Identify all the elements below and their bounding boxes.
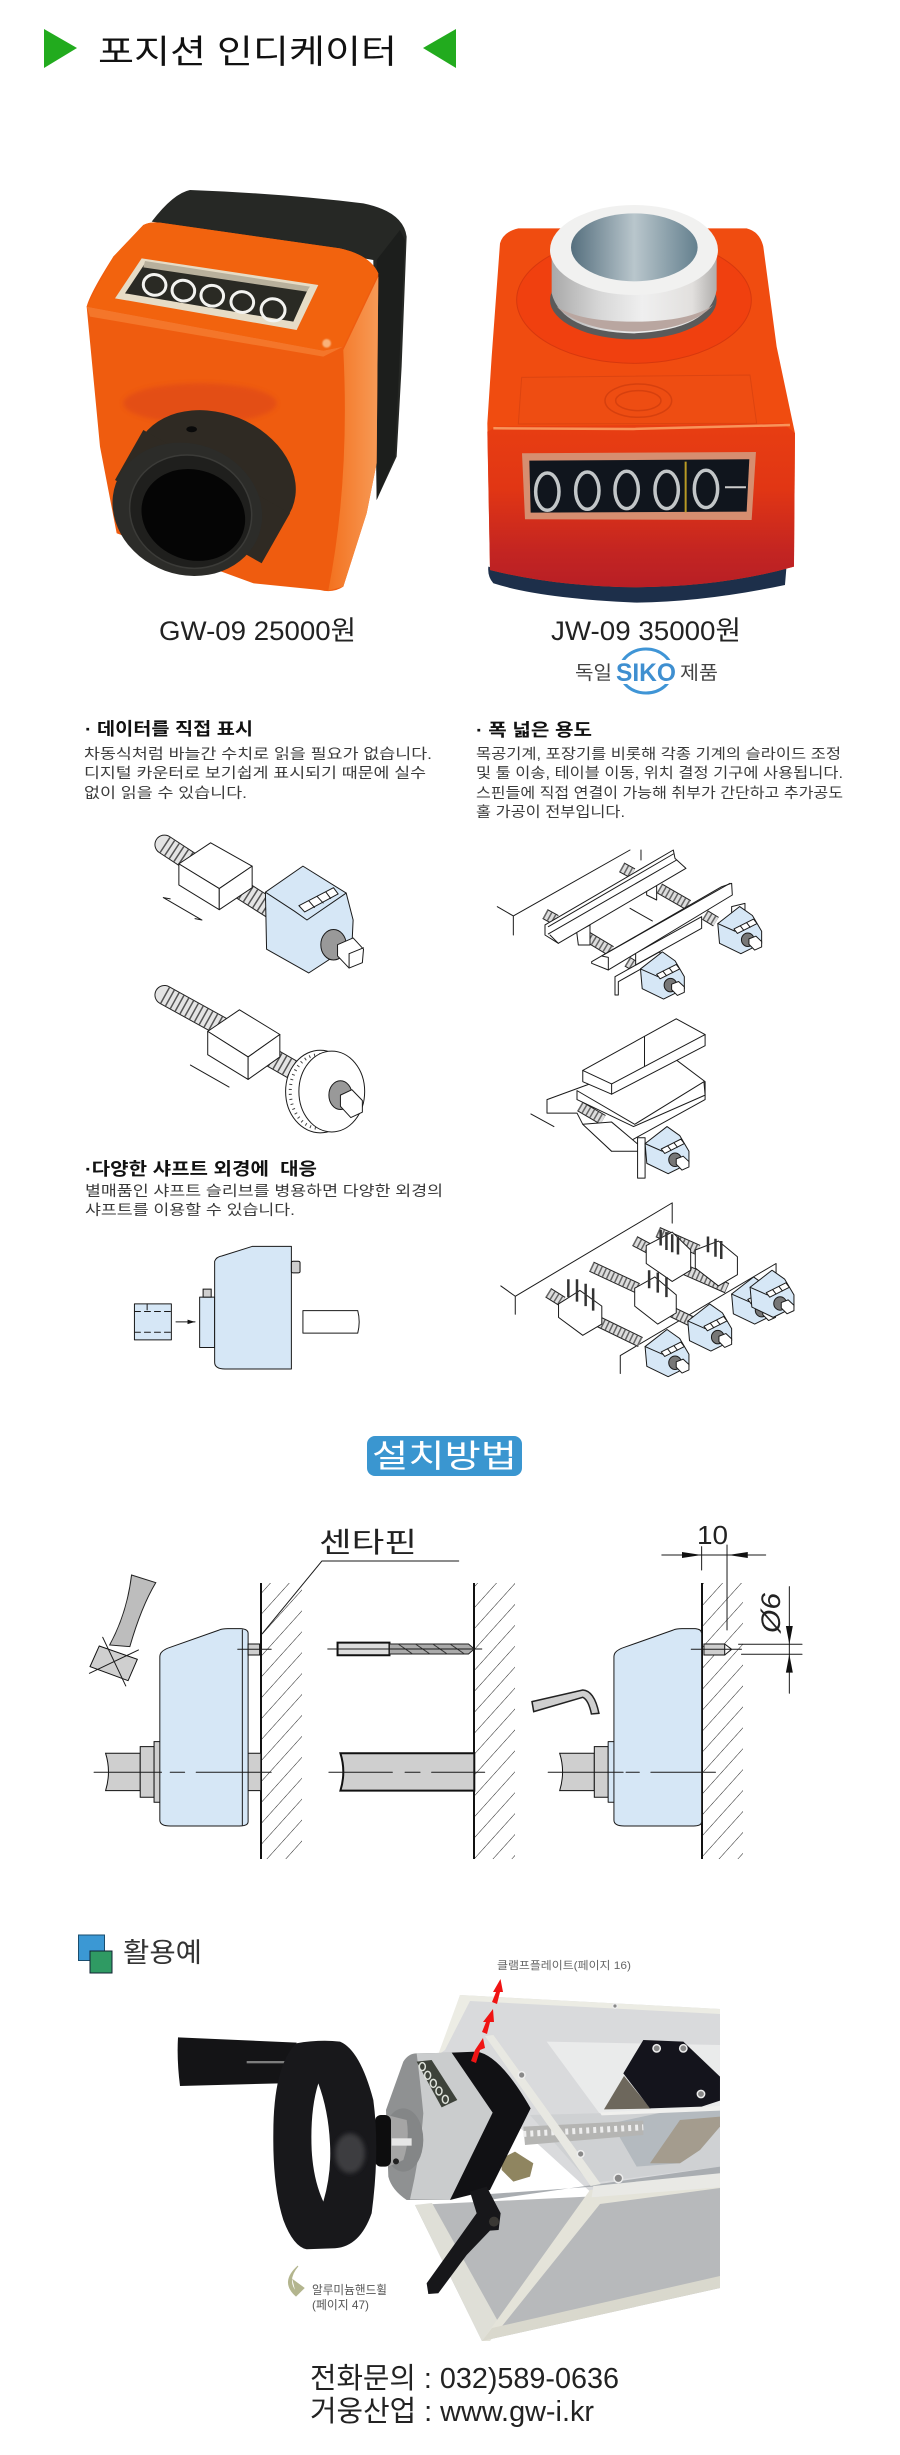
text block: wide range of uses: 및 툴 이송, 테이블 이동, 위치 결정 기구에 사용됩니다. [476, 765, 843, 782]
diagram: multi-axis machine [501, 1203, 794, 1377]
label: dimension 10: 10 [697, 1520, 728, 1550]
caption: GW-09 price: GW-09 25000원 [159, 616, 356, 646]
text block: wide range of uses: 스핀들에 직접 연결이 가능해 취부가 간단하고 추가공도 [476, 785, 843, 802]
text block: various shaft diameters: ·다양한 샤프트 외경에 대응 [85, 1159, 317, 1179]
text block: wide range of uses: · 폭 넓은 용도 [476, 720, 592, 740]
text block: various shaft diameters: 별매품인 샤프트 슬리브를 병용하면 다양한 외경의 [85, 1183, 443, 1200]
slide assembly [485, 2004, 720, 2200]
text block: direct data display: · 데이터를 직접 표시 [85, 719, 253, 739]
icon: curved arrow [288, 2266, 304, 2296]
heading badge: installation method: 설치방법 [372, 1438, 517, 1474]
contact: website: 거웅산업 : www.gw-i.kr [310, 2395, 594, 2428]
diagram: step 2 drilling [328, 1643, 485, 1791]
icon: right green triangle [423, 29, 456, 68]
text block: various shaft diameters: 샤프트를 이용할 수 있습니다. [85, 1202, 295, 1219]
title [44, 29, 456, 70]
text block: wide range of uses: 목공기계, 포장기를 비롯해 각종 기계의 슬라이드 조정 [476, 746, 841, 763]
diagram: slide table [531, 1019, 705, 1178]
text block: direct data display: 차동식처럼 바늘간 수치로 읽을 필요가 없습니다. [84, 746, 432, 763]
text block: various shaft diameters [85, 1159, 443, 1219]
label: aluminum handwheel: (페이지 47) [312, 2298, 369, 2312]
title text: 포지션 인디케이터 [98, 33, 397, 70]
diagram: shaft sleeve [134, 1246, 359, 1369]
icon: left green triangle [44, 29, 77, 68]
text block: wide range of uses: 홀 가공이 전부입니다. [476, 804, 625, 821]
diagram: step 3 fitted with dimensions [532, 1545, 802, 1826]
diagram: step 1 center pin [89, 1561, 459, 1826]
contact: phone: 전화문의 : 032)589-0636 [310, 2363, 619, 2395]
photo: handwheel on acrylic slide [178, 1995, 720, 2341]
badge: made in Germany SIKO: 독일 [575, 662, 612, 684]
label: aluminum handwheel: 알루미늄핸드휠 [312, 2282, 387, 2297]
text block: direct data display: 디지털 카운터로 보기쉽게 표시되기 때문에 실수 [84, 765, 426, 782]
acrylic frame [415, 1995, 720, 2341]
badge: made in Germany SIKO: SIKO [616, 659, 676, 687]
caption: JW-09 price: JW-09 35000원 [551, 616, 741, 646]
badge: made in Germany SIKO [575, 649, 718, 693]
text block: direct data display: 없이 읽을 수 있습니다. [84, 785, 247, 802]
heading badge: installation method [367, 1436, 522, 1476]
diagram: two-rail machine [497, 850, 762, 999]
product photo: JW-09 red indicator [487, 205, 795, 603]
label: aluminum handwheel [312, 2282, 387, 2312]
diagram: screw with digital indicator [163, 843, 364, 973]
indicator body [383, 2052, 531, 2294]
handwheel [178, 2037, 391, 2249]
arrow: red dashed pointer to plate [471, 1979, 503, 2063]
diagram: screw with dial [164, 995, 365, 1133]
text block: direct data display [84, 719, 432, 802]
product photo: GW-09 orange indicator [87, 190, 407, 597]
badge: made in Germany SIKO: 제품 [680, 662, 718, 684]
diagram: installation walls [260, 1583, 743, 1859]
label: clamp plate: 클램프플레이트(페이지 16) [497, 1959, 631, 1972]
heading: application example: 활용예 [123, 1938, 202, 1968]
label: dimension diameter 6: Ø6 [756, 1592, 786, 1634]
label: center pin: 센타핀 [319, 1527, 417, 1558]
icon: overlapping squares [78, 1935, 112, 1973]
text block: wide range of uses [476, 720, 843, 821]
